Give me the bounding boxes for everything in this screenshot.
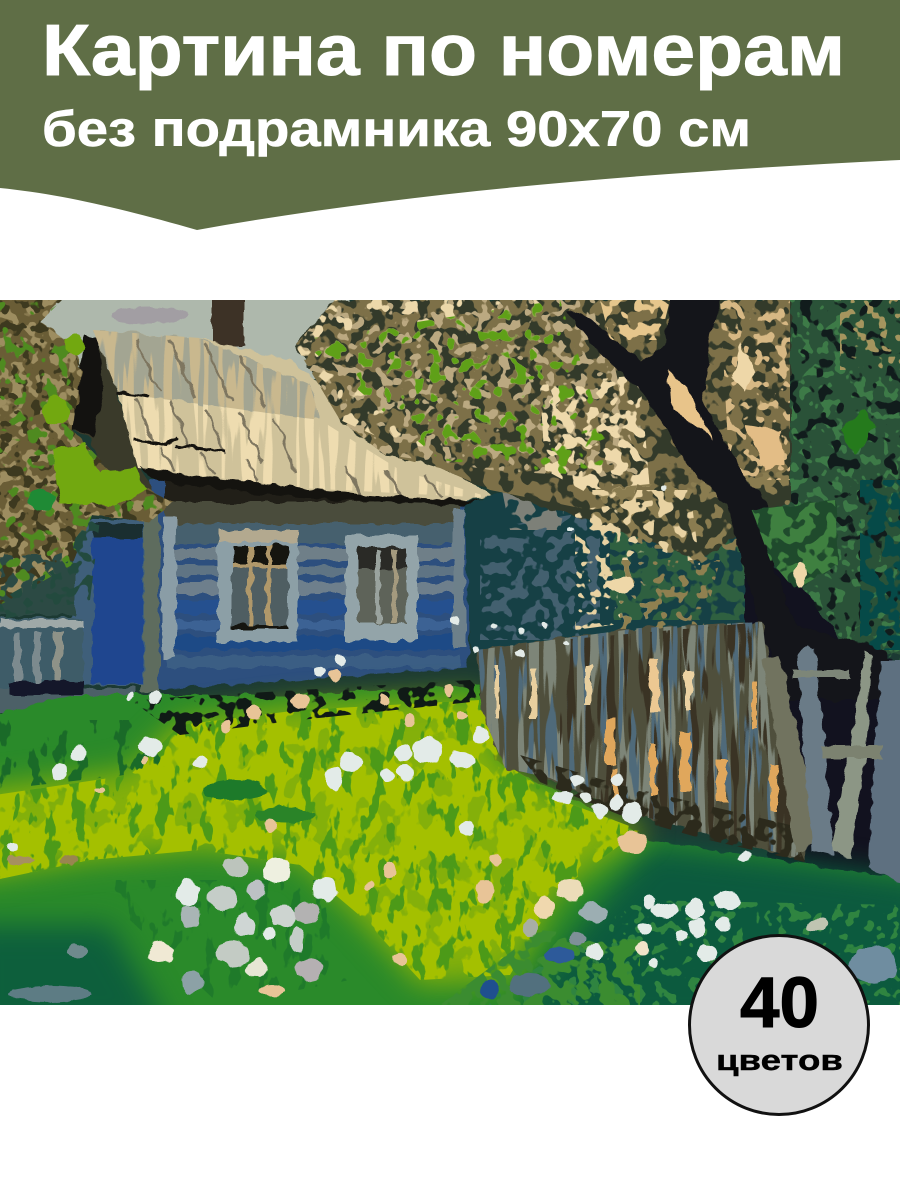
sunlit plank gaps	[495, 660, 778, 810]
peach petals	[5, 669, 648, 995]
title: Картина по номерам	[42, 11, 845, 91]
blossom highlights	[605, 342, 807, 594]
header banner	[0, 0, 900, 230]
dark bottom-left grass	[0, 912, 169, 1005]
tree trunk	[565, 295, 900, 875]
painting: country house with garden	[0, 290, 900, 1030]
left window	[218, 530, 298, 642]
lime lawn	[0, 695, 650, 985]
right tree foliage	[780, 295, 900, 660]
white flowers	[7, 485, 826, 993]
house wall	[141, 478, 470, 693]
badge: 40 colours	[690, 936, 868, 1114]
roof	[93, 330, 492, 506]
wooden fence	[476, 622, 900, 885]
subtitle: без подрамника 90х70 см	[42, 101, 751, 157]
door	[72, 520, 144, 685]
ground and grass	[0, 680, 900, 1030]
tree canopy	[295, 300, 790, 640]
chimney	[212, 298, 244, 346]
badge number: 40	[740, 964, 819, 1043]
painting background	[0, 300, 900, 876]
base green	[0, 685, 900, 1010]
gable	[72, 334, 152, 490]
blue-green thicket	[464, 492, 746, 650]
dark right grass	[514, 839, 900, 1005]
right window	[346, 535, 418, 641]
badge label: цветов	[716, 1045, 843, 1077]
left foliage	[0, 295, 172, 620]
house	[0, 330, 492, 713]
sky	[40, 300, 350, 379]
fence posts	[763, 647, 900, 885]
left fence	[0, 618, 135, 713]
green leaves over trunk	[752, 500, 838, 590]
